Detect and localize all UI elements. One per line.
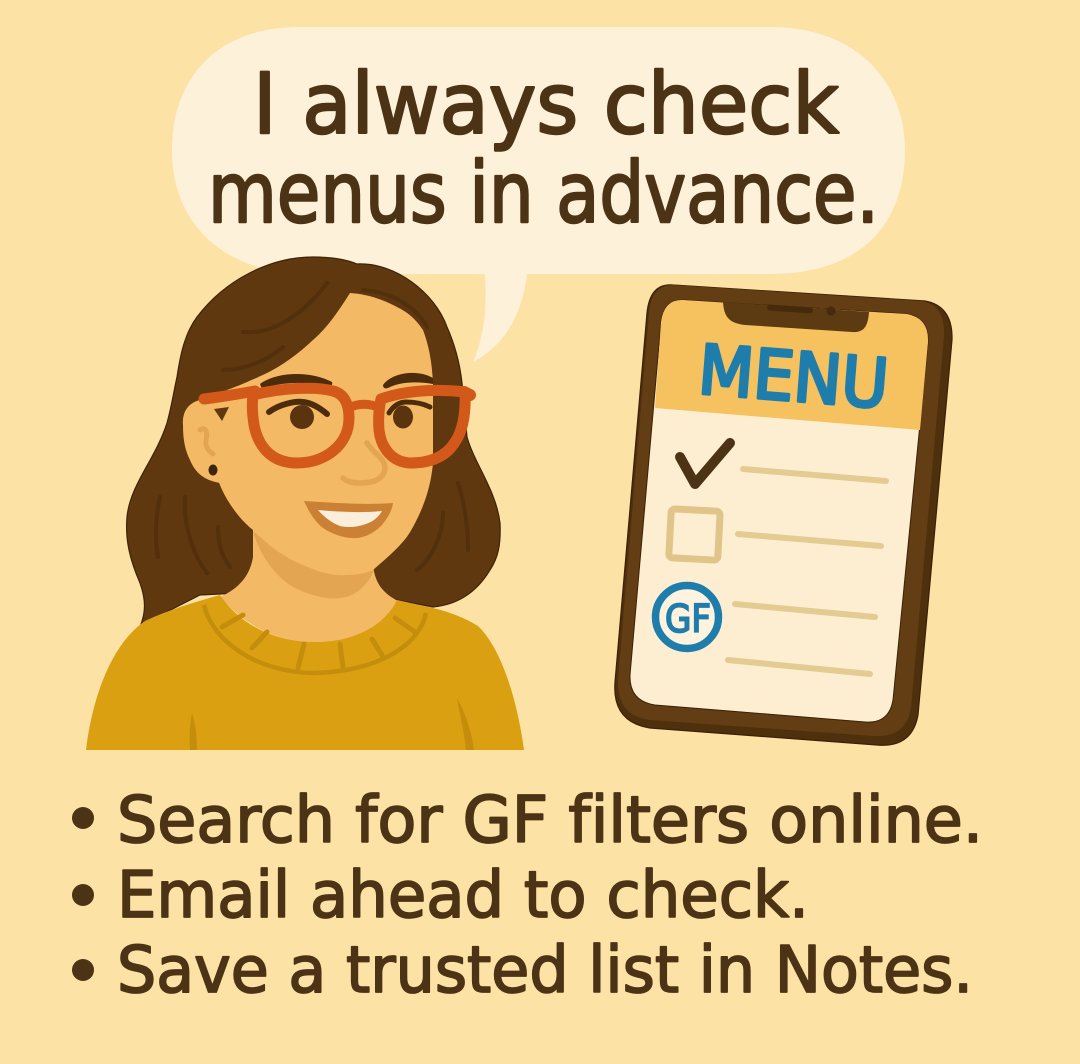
- phone body: [618, 285, 944, 736]
- notch: [723, 302, 869, 332]
- teeth: [318, 510, 382, 527]
- bullet three: Save a trusted list in Notes.: [117, 934, 973, 1008]
- ear: [183, 400, 232, 483]
- collar: [204, 605, 426, 673]
- sweater folds: [190, 698, 474, 750]
- phone screen: [630, 300, 928, 722]
- bullet one: Search for GF filters online.: [117, 784, 983, 858]
- bubble text: menus in advance.: [208, 144, 879, 242]
- sweater: [86, 595, 524, 750]
- inner ear: [200, 429, 213, 454]
- bubble text: I always check: [253, 55, 839, 153]
- right eye: [389, 402, 430, 428]
- hair strands: [156, 283, 468, 573]
- neck shadow: [253, 532, 374, 599]
- GF badge: [656, 586, 718, 648]
- phone: [615, 285, 952, 745]
- neck: [220, 525, 400, 642]
- phone body shadow: [615, 285, 952, 745]
- glasses: [204, 388, 470, 463]
- check mark: [680, 443, 730, 484]
- eyebrows: [260, 374, 332, 389]
- menu lines: [728, 469, 886, 674]
- mouth: [304, 501, 393, 538]
- speech bubble: [172, 27, 905, 362]
- earring: [208, 464, 218, 476]
- bullet list: [72, 784, 983, 1008]
- face: [192, 293, 433, 575]
- empty checkbox: [669, 509, 720, 560]
- hair tip: [214, 407, 229, 421]
- bullet two: Email ahead to check.: [117, 859, 809, 933]
- bubble text: [208, 55, 879, 242]
- nose: [343, 443, 385, 483]
- hair: [127, 257, 500, 627]
- woman illustration: [86, 257, 524, 750]
- menu header: [655, 300, 928, 430]
- left eye: [269, 402, 327, 429]
- menu title: MENU: [696, 331, 891, 425]
- GF badge: GF: [665, 597, 711, 641]
